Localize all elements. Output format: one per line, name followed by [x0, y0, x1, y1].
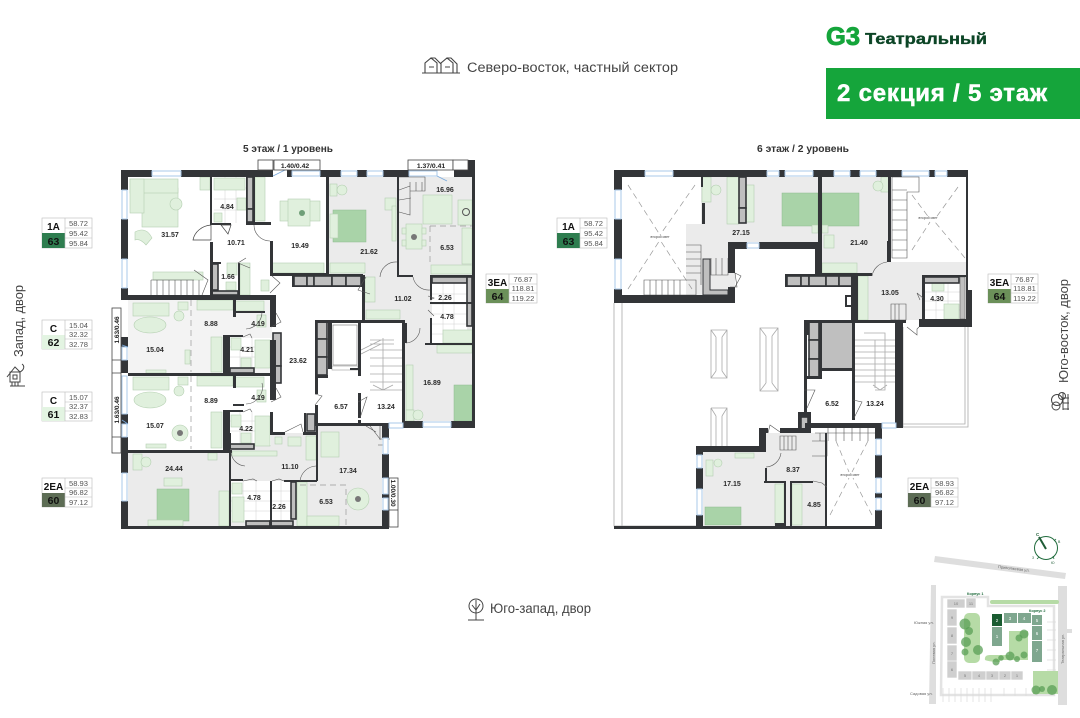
compass: З [1032, 556, 1034, 560]
map labels: 7 [1036, 648, 1039, 653]
room areas: 4.78 [247, 495, 261, 502]
apartment badge: 3EA left plan: 64 [492, 291, 503, 303]
compass: Ю [1051, 561, 1055, 565]
apartment badge: 1A left: 95.84 [69, 239, 88, 248]
room areas: 4.19 [251, 321, 265, 328]
logo: G3 Театральный [826, 23, 987, 51]
service shafts [212, 177, 472, 526]
logo: G3 Театральный: Театральный [865, 31, 987, 48]
room areas: 31.57 [161, 232, 179, 239]
orientation: south-west [468, 599, 591, 620]
dashed zones [191, 226, 472, 526]
room areas: 13.24 [377, 404, 395, 411]
apartment badge: 2EA left [42, 478, 92, 507]
apartment badge: 2EA right plan: 60 [914, 495, 925, 507]
map labels: 5 [964, 673, 967, 678]
apartment badge: 3EA right plan: 64 [994, 291, 1005, 303]
terrace outline [614, 303, 968, 526]
apartment badge: 1A right plan: 1A [562, 222, 575, 233]
map labels: Приволжевая ул. [998, 564, 1030, 573]
map labels: Садовая ул. [910, 691, 933, 696]
compass: С [1036, 532, 1040, 537]
apartment badge: 1A left: 58.72 [69, 219, 88, 228]
orientation: south-west: Юго-запад, двор [490, 601, 591, 616]
apartment badge: C 61: 32.37 [69, 402, 88, 411]
room areas: 17.15 [723, 481, 741, 488]
stairs [151, 177, 425, 451]
room areas: 6.53 [319, 499, 333, 506]
structural walls [121, 160, 475, 529]
balconies: 1.40/0.42 [281, 163, 309, 170]
map labels: 8 [951, 633, 954, 638]
trees [960, 618, 1057, 695]
doors [730, 262, 923, 487]
service shafts [703, 177, 965, 431]
logo: G3 Театральный: G3 [826, 23, 860, 51]
room areas: 8.37 [786, 467, 800, 474]
room areas: 10.71 [227, 240, 245, 247]
apartment badge: C 61: 15.07 [69, 393, 88, 402]
skylights on terrace [711, 328, 778, 446]
apartment badge: C 61: 32.83 [69, 412, 88, 421]
section heading banner: 2 секция / 5 этаж [837, 80, 1048, 107]
orientation: north-east [422, 58, 678, 75]
room areas: 4.85 [807, 502, 821, 509]
map labels: 3 [1009, 616, 1012, 621]
map labels: 9 [951, 615, 954, 620]
map labels: 6 [1036, 631, 1039, 636]
balconies: 1.63/0.46 [114, 396, 121, 424]
apartment badge: 2EA left: 97.12 [69, 498, 88, 507]
double height voids with dashed cross: второй свет [840, 473, 860, 477]
map labels: 5 [1036, 618, 1039, 623]
windows [615, 171, 947, 515]
doors [122, 170, 447, 481]
room areas: 4.22 [239, 426, 253, 433]
icon: playground [7, 364, 25, 386]
apartment badge: 1A right plan: 95.42 [584, 229, 603, 238]
room areas: 2.26 [272, 504, 286, 511]
map labels: 3 [991, 673, 994, 678]
roads [929, 556, 1072, 705]
apartment badge: 2EA left: 60 [48, 495, 59, 507]
apartment badge: 2EA left: 96.82 [69, 488, 88, 497]
apartment badge: 3EA left plan: 119.22 [512, 294, 534, 303]
apartment badge: 1A left: 1A [47, 222, 60, 233]
green areas [964, 600, 1059, 694]
room areas: 4.84 [220, 204, 234, 211]
room areas: 6.57 [334, 404, 348, 411]
icon: houses [422, 58, 460, 73]
apartment badge: 3EA right plan: 3EA [990, 278, 1009, 289]
map labels: Корпус 2 [1029, 609, 1046, 613]
map labels: 4 [1023, 616, 1026, 621]
room areas: 4.19 [251, 395, 265, 402]
apartment badge: 2EA left: 2EA [44, 482, 63, 493]
apartment badge: 1A right plan: 95.84 [584, 239, 603, 248]
orientation: south-east [1052, 279, 1071, 410]
heading: level 1: 5 этаж / 1 уровень [243, 144, 333, 155]
room areas: 4.30 [930, 296, 944, 303]
apartment badge: 3EA right plan: 118.81 [1013, 284, 1036, 293]
furniture [702, 177, 959, 525]
room fills [686, 177, 966, 526]
room areas [723, 230, 944, 509]
room areas: 11.02 [394, 296, 412, 303]
stairs [644, 177, 919, 456]
map labels: 11 [969, 601, 974, 606]
apartment badge: 3EA left plan: 118.81 [512, 284, 534, 293]
room areas: 21.40 [850, 240, 868, 247]
icon: tree [468, 599, 484, 620]
apartment badge: 1A left: 95.42 [69, 229, 88, 238]
orientation: south-east: Юго-восток, двор [1056, 279, 1071, 383]
double height voids with dashed cross: второй свет [650, 235, 670, 239]
compass [1032, 532, 1061, 565]
apartment badge: 2EA right plan: 96.82 [935, 488, 954, 497]
apartment badge: 2EA left: 58.93 [69, 479, 88, 488]
room areas: 8.89 [204, 398, 218, 405]
map labels: Корпус 1 [967, 592, 984, 596]
room fills [128, 177, 472, 527]
apartment badge: 2EA right plan: 58.93 [935, 479, 954, 488]
apartment badge: 2EA right plan [908, 478, 958, 507]
apartment badge: 2EA right plan: 97.12 [935, 498, 954, 507]
room areas: 2.26 [438, 295, 452, 302]
apartment badge: 1A right plan: 63 [563, 236, 574, 248]
parking [943, 622, 1056, 702]
room areas: 6.52 [825, 401, 839, 408]
map labels: 6 [951, 667, 954, 672]
apartment badge: 3EA right plan: 76.87 [1015, 275, 1034, 284]
orientation: west: Запад, двор [11, 285, 26, 357]
apartment badge: 1A left [42, 218, 92, 248]
apartment badge: C 61: 61 [48, 409, 59, 421]
section heading banner [826, 68, 1080, 119]
balconies [112, 160, 468, 527]
apartment badge: C 61: C [50, 396, 57, 407]
room areas: 13.24 [866, 401, 884, 408]
apartment badge: 1A right plan [557, 218, 607, 248]
map labels: Полевая ул. [931, 641, 936, 664]
room areas: 21.62 [360, 249, 378, 256]
room areas: 13.05 [881, 290, 899, 297]
windows [122, 171, 451, 510]
room areas [146, 187, 454, 511]
room areas: 15.04 [146, 347, 164, 354]
compass: В [1058, 540, 1061, 544]
apartment badge: 3EA right plan [988, 274, 1038, 303]
room areas: 24.44 [165, 466, 183, 473]
orientation: north-east: Северо-восток, частный сектор [467, 60, 678, 75]
apartment badge: 2EA right plan: 2EA [910, 482, 929, 493]
heading: level 2: 6 этаж / 2 уровень [757, 144, 849, 155]
room areas: 4.21 [240, 347, 254, 354]
balconies: 1.00/0.30 [389, 479, 396, 507]
double height voids with dashed cross: второй свет [918, 216, 938, 220]
room areas: 17.34 [339, 468, 357, 475]
map labels: 1 [996, 634, 999, 639]
map labels [910, 564, 1065, 696]
floor plan: 6th floor [614, 170, 972, 529]
room areas: 19.49 [291, 243, 309, 250]
room areas: 27.15 [732, 230, 750, 237]
apartment badge: C 62 [42, 320, 92, 349]
room areas: 1.66 [221, 274, 235, 281]
apartment badge: C 62: 62 [48, 337, 59, 349]
apartment badge: 1A left: 63 [48, 236, 59, 248]
balconies: 1.63/0.46 [114, 316, 121, 344]
map labels: 1 [1016, 673, 1019, 678]
room areas: 15.07 [146, 423, 164, 430]
map labels: 2 [996, 618, 999, 623]
apartment badge: 3EA left plan: 3EA [488, 278, 507, 289]
apartment badge: C 61 [42, 392, 92, 421]
balconies: 1.37/0.41 [417, 163, 445, 170]
room areas: 4.78 [440, 314, 454, 321]
site map [910, 556, 1072, 705]
apartment badge: C 62: 15.04 [69, 321, 88, 330]
furniture: green kitchen, bathroom, living pieces [130, 177, 472, 526]
apartment badge: C 62: 32.32 [69, 330, 88, 339]
room areas: 11.10 [281, 464, 299, 471]
icon: trees [1052, 392, 1069, 410]
floor plan: 5th floor [112, 160, 475, 529]
map labels: 10 [954, 601, 959, 606]
structural walls [614, 170, 972, 529]
orientation: west [7, 285, 26, 386]
apartment badge: C 62: C [50, 324, 57, 335]
apartment badge: C 62: 32.78 [69, 340, 88, 349]
room areas: 6.53 [440, 245, 454, 252]
map labels: 2 [1004, 673, 1007, 678]
bathroom tiles [214, 177, 467, 522]
room areas: 23.62 [289, 358, 307, 365]
map labels: 4 [978, 673, 981, 678]
room areas: 16.89 [423, 380, 441, 387]
apartment badge: 3EA left plan: 76.87 [513, 275, 533, 284]
apartment badge: 3EA right plan: 119.22 [1013, 294, 1036, 303]
map labels: 7 [951, 651, 954, 656]
map labels: Южная ул. [914, 620, 934, 625]
apartment badge: 3EA left plan [486, 274, 537, 303]
building sections [947, 598, 1042, 680]
room areas: 8.88 [204, 321, 218, 328]
apartment badge: 1A right plan: 58.72 [584, 219, 603, 228]
map labels: Театральная ул. [1060, 634, 1065, 664]
double height voids with dashed cross [628, 185, 965, 515]
room areas: 16.96 [436, 187, 454, 194]
